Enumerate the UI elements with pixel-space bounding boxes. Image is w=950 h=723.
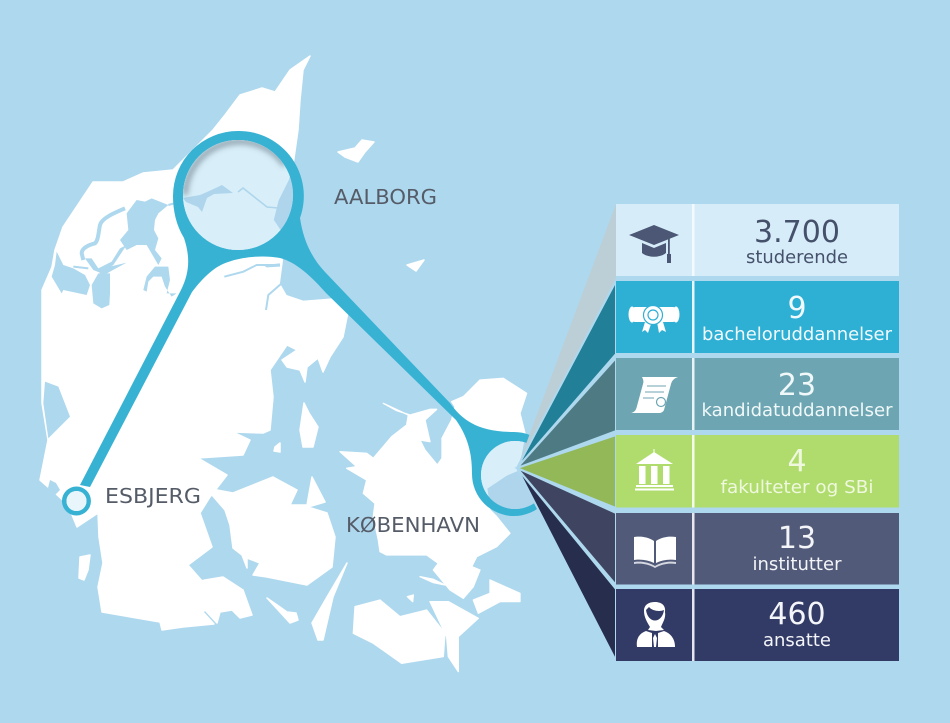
value: 23 kandidatuddannelser: kandidatuddannelser xyxy=(702,400,893,421)
icon: scroll certificate xyxy=(631,377,678,413)
table row: bachelor programmes xyxy=(616,281,899,353)
value: 13 institutter xyxy=(752,521,842,575)
city label: Aalborg: AALBORG xyxy=(334,185,437,209)
icon: graduation cap xyxy=(629,225,679,263)
fan of wedges from København to the table xyxy=(517,204,616,661)
value: 9 bacheloruddannelser xyxy=(702,291,893,345)
value: 9 bacheloruddannelser: 9 xyxy=(787,291,807,326)
value: 4 fakulteter og SBi xyxy=(720,444,874,498)
icon: institution building xyxy=(635,449,674,490)
infographic canvas xyxy=(39,55,899,672)
table row: employees xyxy=(616,589,899,661)
city label: Esbjerg: ESBJERG xyxy=(105,484,201,508)
value: 3.700 studerende: studerende xyxy=(746,247,848,268)
value: 3.700 studerende: 3.700 xyxy=(754,215,840,250)
magnifier lens: København xyxy=(481,441,534,509)
value: 9 bacheloruddannelser: bacheloruddannelser xyxy=(702,324,893,345)
magnifier lens: Esbjerg xyxy=(66,491,86,511)
value: 4 fakulteter og SBi: 4 xyxy=(787,444,807,479)
icon: person in suit xyxy=(637,602,675,647)
value: 23 kandidatuddannelser: 23 xyxy=(778,368,816,403)
value: 460 ansatte: 460 xyxy=(768,597,826,632)
table row: students xyxy=(616,204,899,276)
value: 13 institutter: institutter xyxy=(752,554,842,575)
map of Denmark xyxy=(40,56,527,672)
connector: lines and magnifier rings xyxy=(62,131,556,516)
city label: København: KØBENHAVN xyxy=(346,513,480,537)
value: 4 fakulteter og SBi: fakulteter og SBi xyxy=(720,477,874,498)
value: 23 kandidatuddannelser xyxy=(702,368,893,421)
value: 13 institutter: 13 xyxy=(778,521,816,556)
value: 460 ansatte xyxy=(763,597,831,651)
magnifier lens: Aalborg xyxy=(183,140,293,250)
table row: master programmes xyxy=(616,358,899,430)
value: 460 ansatte: ansatte xyxy=(763,630,831,651)
table row: faculties xyxy=(616,435,899,508)
icon: diploma xyxy=(628,306,680,333)
table row: departments xyxy=(616,513,899,584)
icon: open book xyxy=(634,537,676,568)
value: 3.700 studerende xyxy=(746,215,848,268)
